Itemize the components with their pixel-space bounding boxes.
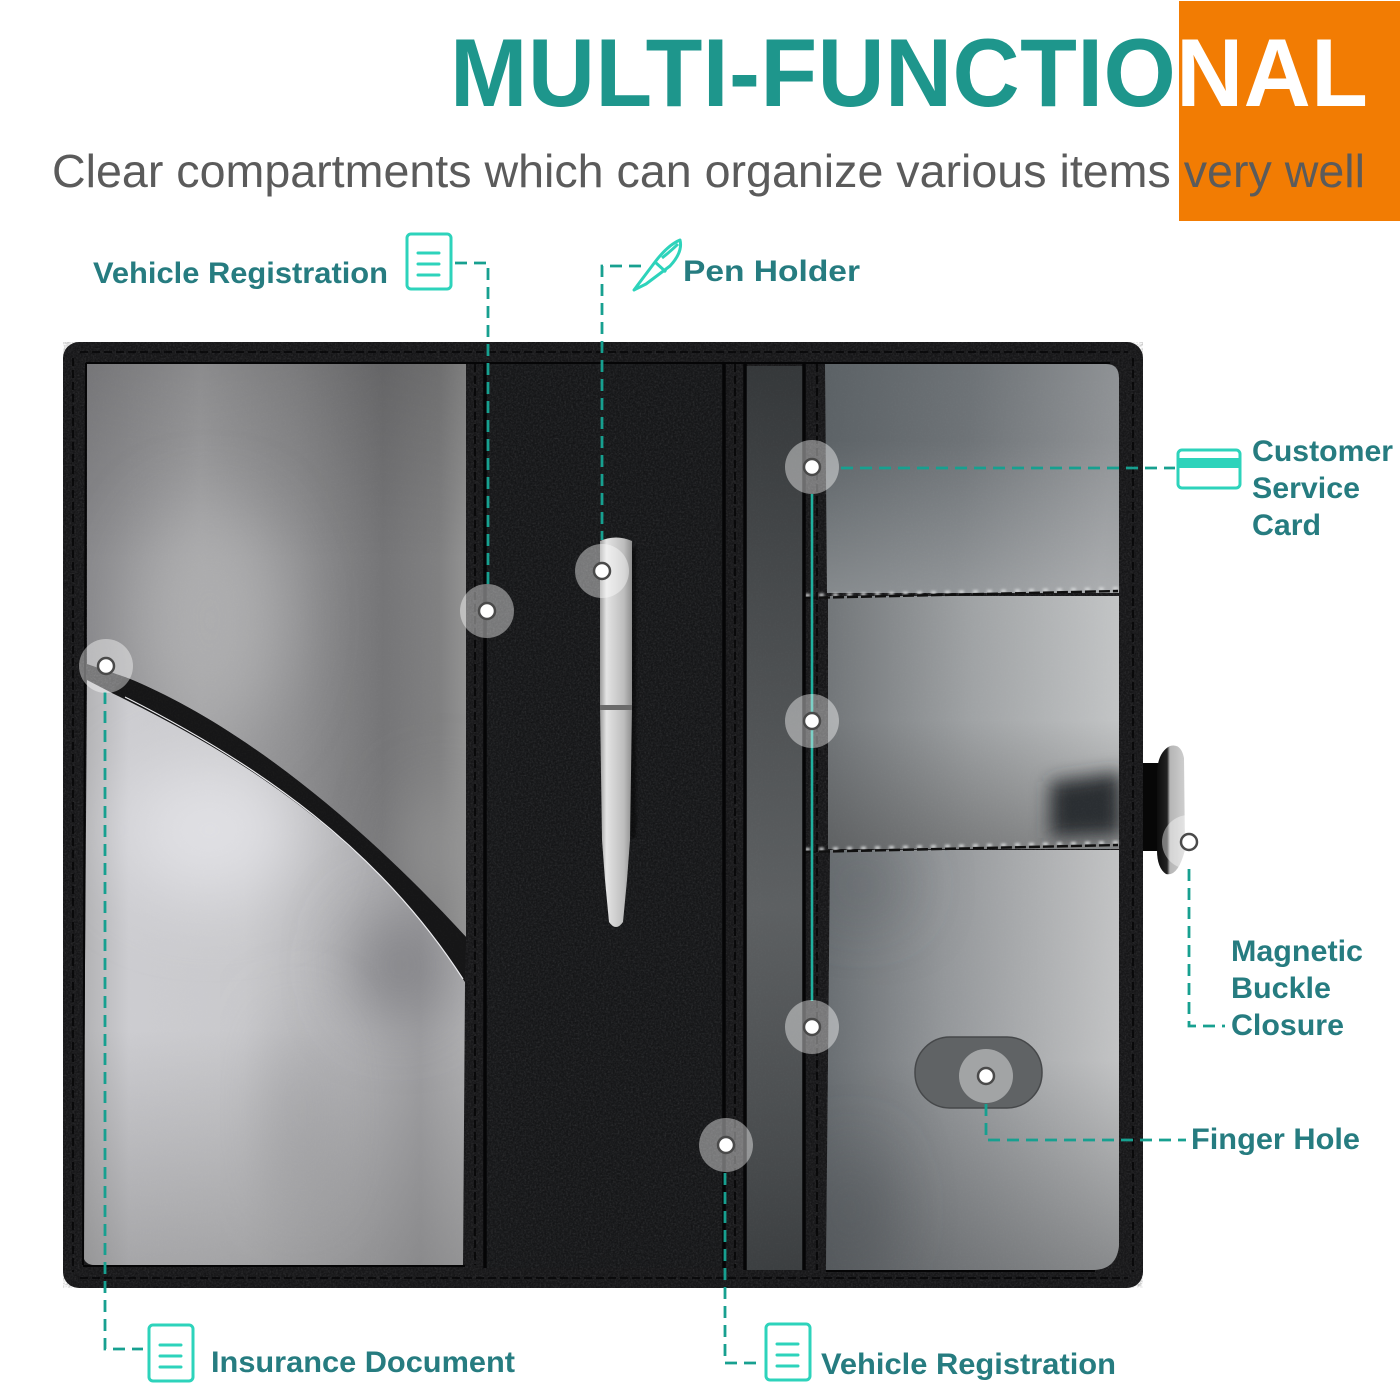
marker dots (79, 440, 1216, 1172)
callout lines (105, 263, 1225, 1363)
pocket stitching (805, 588, 1118, 852)
right top pocket (820, 360, 1120, 595)
icon: document top (407, 234, 451, 289)
pen shadow (630, 548, 636, 838)
label: magnetic buckle closure (1231, 935, 1363, 1042)
pocket rim highlight (125, 697, 463, 979)
curved pocket edge (112, 677, 466, 982)
left upper pocket (87, 364, 466, 937)
panel grain (63, 342, 1143, 1288)
inner seams (83, 363, 1110, 1271)
subtitle: Clear compartments which can organize various items very well (52, 145, 1365, 197)
title: MULTI-FUNCTIONAL (450, 19, 1368, 127)
right bottom pocket (820, 850, 1120, 1275)
center leather (486, 364, 724, 1268)
icon: pen (634, 240, 681, 290)
stitching lines (73, 352, 1133, 1278)
wallet outer cover (63, 342, 1143, 1288)
finger hole (915, 1037, 1042, 1108)
narrow inner slot (746, 366, 804, 1270)
label: insurance document: Insurance Document (211, 1346, 515, 1379)
right middle pocket (825, 595, 1122, 850)
label: magnetic buckle closure: Magnetic (1231, 935, 1363, 968)
label: customer service card (1252, 435, 1393, 542)
orange block (1179, 1, 1400, 221)
wallet (63, 342, 1185, 1288)
magnetic buckle (1157, 746, 1185, 874)
label: vehicle registration top: Vehicle Registration (93, 257, 388, 290)
strap tab (1140, 763, 1162, 851)
pen ring (600, 705, 632, 710)
label: magnetic buckle closure: Buckle (1231, 972, 1331, 1005)
label: magnetic buckle closure: Closure (1231, 1009, 1344, 1042)
label: vehicle registration bottom: Vehicle Registration (821, 1348, 1116, 1381)
pen (600, 538, 636, 927)
icon: card (1178, 450, 1240, 488)
label: customer service card: Card (1252, 509, 1321, 542)
leather grain (63, 342, 1143, 1288)
label: customer service card: Service (1252, 472, 1360, 505)
left lower pocket (80, 680, 475, 1270)
icon: document vehicle bottom (766, 1324, 810, 1380)
label: customer service card: Customer (1252, 435, 1393, 468)
pen body (600, 538, 632, 927)
leather texture (63, 342, 1143, 1288)
label: pen holder: Pen Holder (683, 255, 860, 288)
label: finger hole: Finger Hole (1191, 1123, 1360, 1156)
icon: document insurance (149, 1325, 193, 1381)
